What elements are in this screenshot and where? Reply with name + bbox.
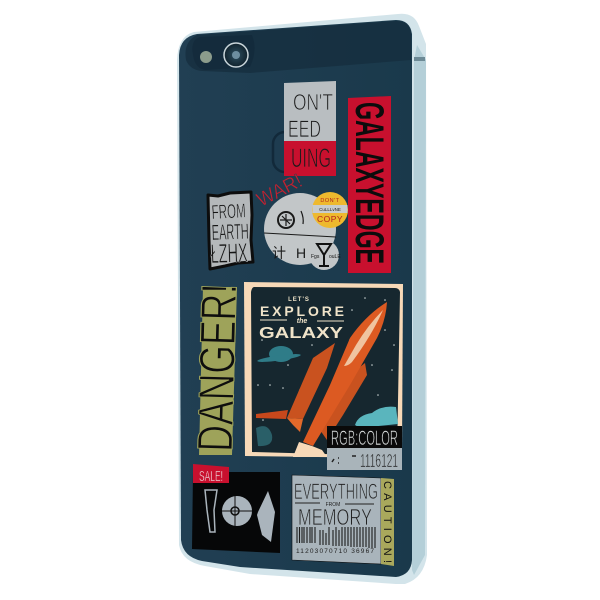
sticker: on't eed uing: EED xyxy=(288,116,321,143)
sticker: caution: CAUTION! xyxy=(381,481,393,563)
sticker: rgb color: RGB:COLOR xyxy=(331,427,398,450)
sticker: don't copy: COPY xyxy=(317,214,343,224)
sticker: rgb color: 1116121 xyxy=(360,451,398,471)
main rocket xyxy=(303,302,387,446)
poster title: EXPLORE xyxy=(260,303,344,319)
sticker: don't copy: CuLLLvNE xyxy=(319,207,341,212)
sticker: rgb color xyxy=(327,426,402,471)
sticker: galaxy edge: GALAXYEDGE xyxy=(347,102,391,264)
wing strip xyxy=(256,410,288,419)
sticker: y circle: ouLE xyxy=(329,254,341,260)
sticker: everything from memory: FROM xyxy=(326,502,340,508)
barcode xyxy=(297,527,375,548)
sticker: sale: SALE! xyxy=(199,468,223,485)
sticker: from earth: ŁZHX xyxy=(210,238,248,269)
sticker: black panel xyxy=(192,472,280,553)
left booster xyxy=(287,343,335,419)
sticker: everything from memory: 11203070710 36967 xyxy=(296,548,374,555)
smoke xyxy=(293,442,327,457)
right booster xyxy=(320,363,367,440)
poster title: GALAXY xyxy=(259,325,343,342)
rockets xyxy=(256,302,387,457)
camera lens xyxy=(224,43,248,67)
sticker: from earth xyxy=(208,192,253,269)
poster stars xyxy=(257,297,395,426)
sticker: galaxy edge xyxy=(347,96,391,273)
sticker: on't eed uing xyxy=(284,81,336,176)
phone body xyxy=(179,20,412,577)
tie icons xyxy=(222,496,252,526)
sticker: death star xyxy=(253,170,336,265)
sticker: don't copy: DON'T xyxy=(320,198,340,204)
sticker: death star: H xyxy=(296,245,306,261)
poster title: LET'S xyxy=(288,297,310,303)
sticker: sale xyxy=(193,464,229,485)
sticker: danger: DANGER! xyxy=(187,283,247,452)
sticker: from earth: FROM xyxy=(211,200,246,224)
sticker: don't copy xyxy=(312,192,348,228)
sticker: everything from memory xyxy=(292,475,381,564)
sticker: everything from memory: EVERYTHING xyxy=(294,479,378,504)
fingerprint sensor xyxy=(273,132,307,172)
sticker: y circle: Fgs xyxy=(311,254,320,260)
sticker: death star: WAR! xyxy=(253,170,306,211)
sticker: everything from memory: MEMORY xyxy=(298,504,372,530)
sticker: death star: 计 xyxy=(272,245,286,261)
phone case xyxy=(177,14,427,584)
poster title xyxy=(259,297,344,342)
poster: explore the galaxy xyxy=(244,282,403,458)
teal cloud xyxy=(355,407,398,428)
sticker: from earth: EARTH xyxy=(211,219,249,245)
sticker: y circle xyxy=(309,240,341,270)
camera band xyxy=(185,21,411,73)
sticker: on't eed uing: ON'T xyxy=(293,89,333,115)
sticker: on't eed uing: UING xyxy=(291,143,331,173)
planet xyxy=(257,346,301,364)
poster title: the xyxy=(297,318,307,325)
flash xyxy=(200,51,212,63)
